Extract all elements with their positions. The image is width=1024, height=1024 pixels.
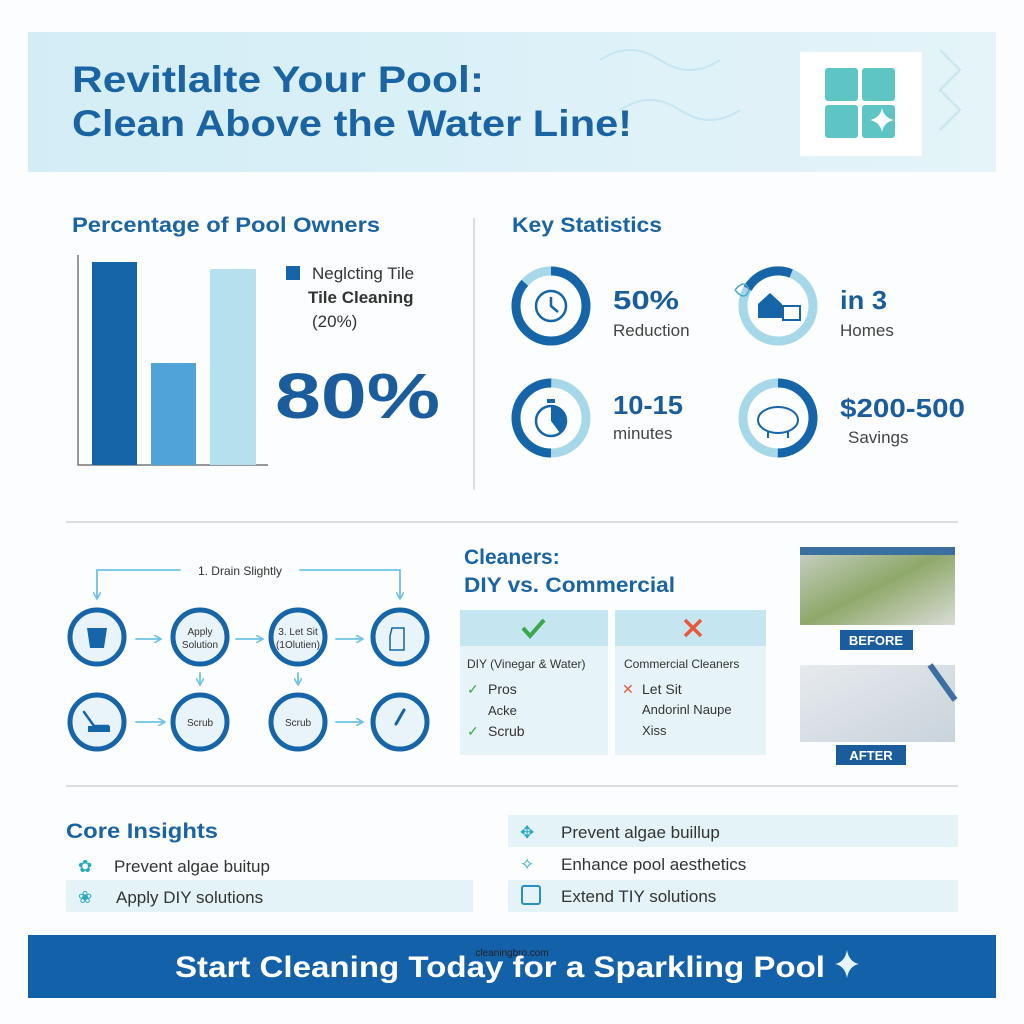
icon: tiles [800,52,922,156]
insights list left: Prevent algae buitup [114,857,270,876]
heading: core insights: Core Insights [66,820,218,843]
comparison table: commercial: Let Sit [642,681,682,697]
insights list right: Extend TIY solutions [561,887,716,906]
stat: savings: Savings [848,428,908,447]
heading: percentage of pool owners: Percentage of Pool Owners [72,214,380,237]
comparison table: DIY: Scrub [488,723,525,739]
stat: 10-15 minutes: 10-15 [613,390,683,420]
stat: 10-15 minutes: minutes [613,424,673,443]
process flow: (1Olutien) [276,640,320,651]
photo: before [800,547,955,650]
legend: Neglcting Tile [312,264,414,283]
insights list left: ❀ [78,888,92,907]
heading: cleaners: DIY vs. Commercial [464,574,675,597]
stat: 10-15 minutes [516,383,683,453]
process flow [70,564,427,749]
insights list left: ✿ [78,857,92,876]
process flow: Solution [182,640,218,651]
legend: (20%) [312,312,357,331]
process flow: Scrub [187,718,213,729]
stat: 50% reduction: 50% [613,285,679,315]
insights list left [66,857,473,912]
big stat 80%: 80% [275,360,440,432]
heading: key statistics: Key Statistics [512,214,662,237]
comparison table: commercial [615,610,766,755]
process flow: 1. Drain Slightly [198,564,282,578]
insights list right: Prevent algae buillup [561,823,720,842]
legend: Tile Cleaning [308,288,414,307]
stat: in 3 homes: Homes [840,321,894,340]
comparison table: DIY: ✓ [467,723,479,739]
comparison table: commercial: ✕ [622,681,634,697]
comparison table: DIY: ✓ [467,681,479,697]
process flow: Scrub [285,718,311,729]
stat: savings: $200-500 [840,393,965,423]
footer banner [28,935,996,998]
heading: cleaners: Cleaners: [464,546,560,569]
stat: 50% reduction: Reduction [613,321,690,340]
comparison table: DIY: Acke [488,703,517,718]
stat: in 3 homes [730,258,894,354]
insights list right [508,815,958,912]
insights list left: Apply DIY solutions [116,888,263,907]
comparison table: DIY: DIY (Vinegar & Water) [467,657,586,671]
insights list right: ✧ [520,855,534,874]
heading: cleaners [464,546,675,597]
stat: in 3 homes: in 3 [840,285,887,315]
comparison table: DIY [460,610,608,755]
footer banner: Start Cleaning Today for a Sparkling Pool [175,951,825,984]
bar chart [78,255,268,465]
insights list right: Enhance pool aesthetics [561,855,746,874]
header banner [28,32,996,172]
insights list right: ✥ [520,823,534,842]
comparison table: commercial: Xiss [642,723,667,738]
process flow: Apply [187,627,213,638]
title: Revitlalte Your Pool: [72,59,484,100]
title [72,59,632,144]
title: Clean Above the Water Line! [72,103,632,144]
comparison table: DIY: Pros [488,681,517,697]
photo: after: AFTER [849,748,893,763]
stat: savings [743,383,965,453]
photo: after [800,665,955,765]
process flow: 3. Let Sit [278,627,318,638]
stat: 50% reduction [516,271,690,341]
footer banner: cleaningbro.com [475,948,549,959]
comparison table: commercial: Commercial Cleaners [624,657,739,671]
comparison table: commercial: Andorinl Naupe [642,702,732,717]
legend [286,264,414,331]
photo: before: BEFORE [849,633,903,648]
